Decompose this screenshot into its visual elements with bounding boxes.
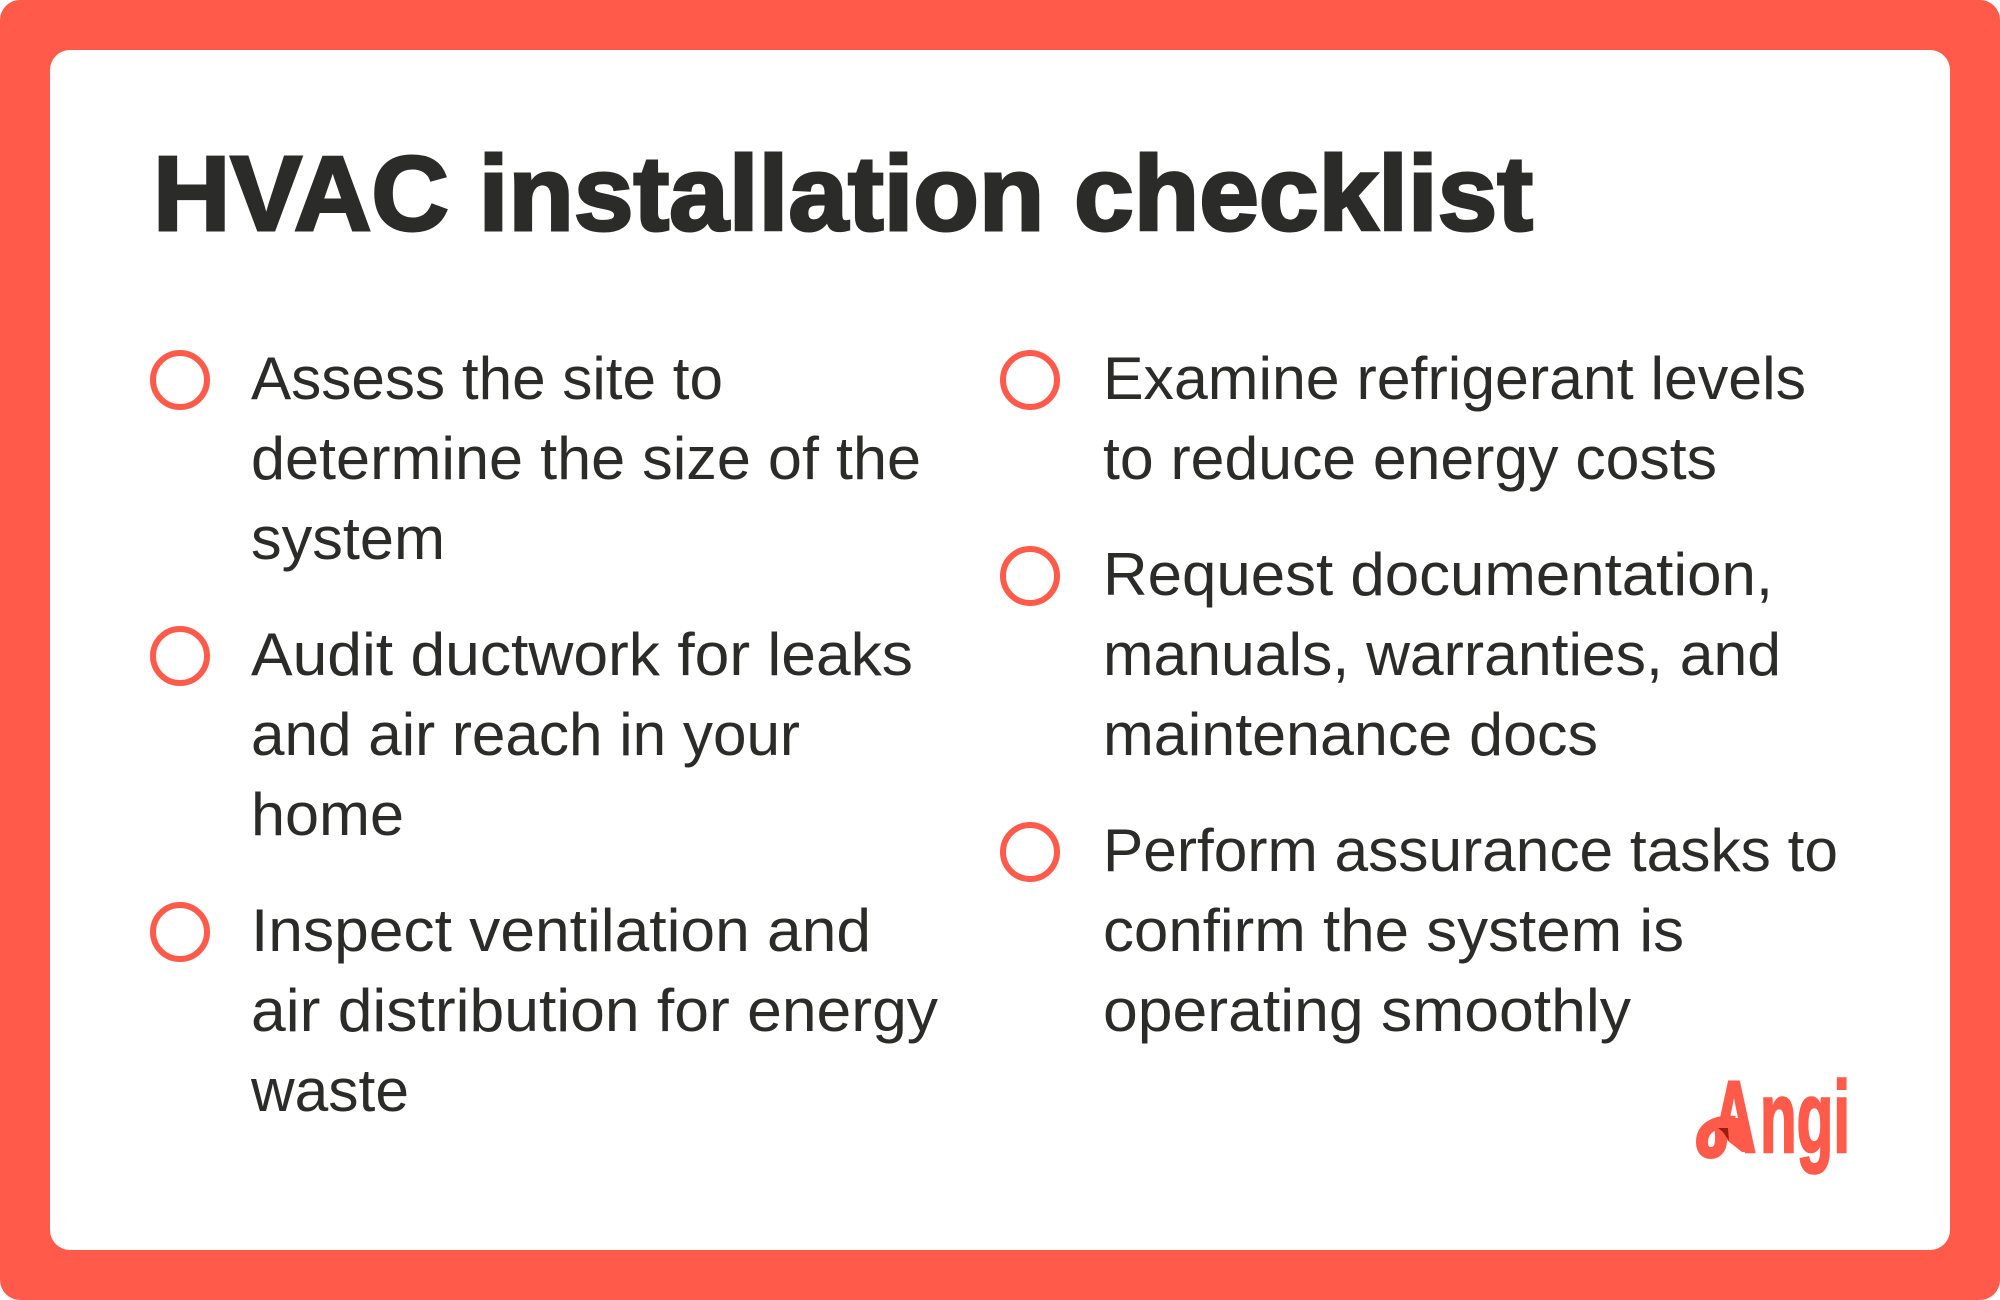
checklist item: assess the site [153,345,921,572]
checklist item: perform assurance tasks: confirm the system is [1103,897,1684,964]
checklist item: audit ductwork: and air reach in your [251,701,800,768]
checklist item: examine refrigerant: to reduce energy costs [1103,425,1717,492]
logo: Angi [1696,1077,1847,1175]
checklist item: perform assurance tasks: Perform assurance tasks to [1103,817,1838,884]
checklist item: request documentation: Request documentation, [1103,541,1773,608]
checklist item: inspect ventilation [153,897,938,1124]
logo: Angi: A [1712,1062,1756,1174]
checklist item: audit ductwork: home [251,781,404,848]
checklist item: request documentation: maintenance docs [1103,701,1598,768]
checklist item: examine refrigerant: Examine refrigerant levels [1103,345,1806,412]
checklist item: request documentation: manuals, warranties, and [1103,621,1781,688]
checklist item: perform assurance tasks [1003,817,1838,1044]
checklist item: audit ductwork [153,621,913,848]
checklist item: assess the site: Assess the site to [251,345,723,412]
checklist item: audit ductwork: Audit ductwork for leaks [251,621,913,688]
checklist item: perform assurance tasks: operating smoothly [1103,977,1631,1044]
checklist item: request documentation [1003,541,1781,768]
checklist item: assess the site: system [251,505,445,572]
checklist item: assess the site: determine the size of the [251,425,921,492]
logo: Angi: ngi [1760,1062,1850,1174]
checklist item: examine refrigerant [1003,345,1806,492]
checklist item: inspect ventilation: Inspect ventilation and [251,897,871,964]
checklist item: inspect ventilation: air distribution for energy [251,977,938,1044]
title: HVAC installation checklist [153,135,1533,253]
checklist item: inspect ventilation: waste [250,1057,409,1124]
